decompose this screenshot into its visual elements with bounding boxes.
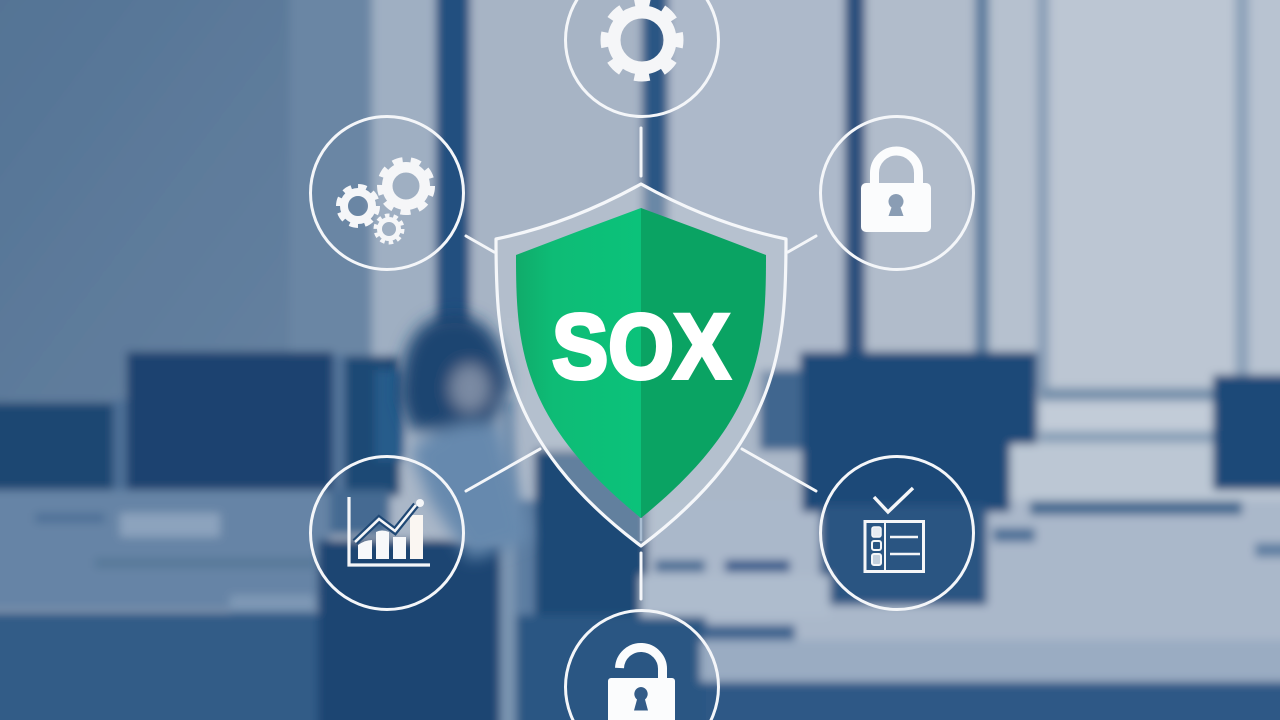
soft blurred person <box>400 315 530 560</box>
icon circle: growth bar chart <box>310 456 464 610</box>
shield green right half <box>641 208 766 518</box>
shield green left half <box>516 208 641 518</box>
connector lines <box>466 128 816 599</box>
icon circle: top single gear <box>566 0 718 116</box>
icon circle: open padlock <box>566 610 718 720</box>
icon circle: closed padlock <box>820 116 974 270</box>
inner stem line <box>640 518 642 541</box>
icon circle: three gears <box>310 116 464 270</box>
shield outer translucent frame <box>496 184 786 546</box>
SOX label: SOX <box>552 296 730 398</box>
shield <box>496 184 786 546</box>
icon circle: checklist <box>820 456 974 610</box>
